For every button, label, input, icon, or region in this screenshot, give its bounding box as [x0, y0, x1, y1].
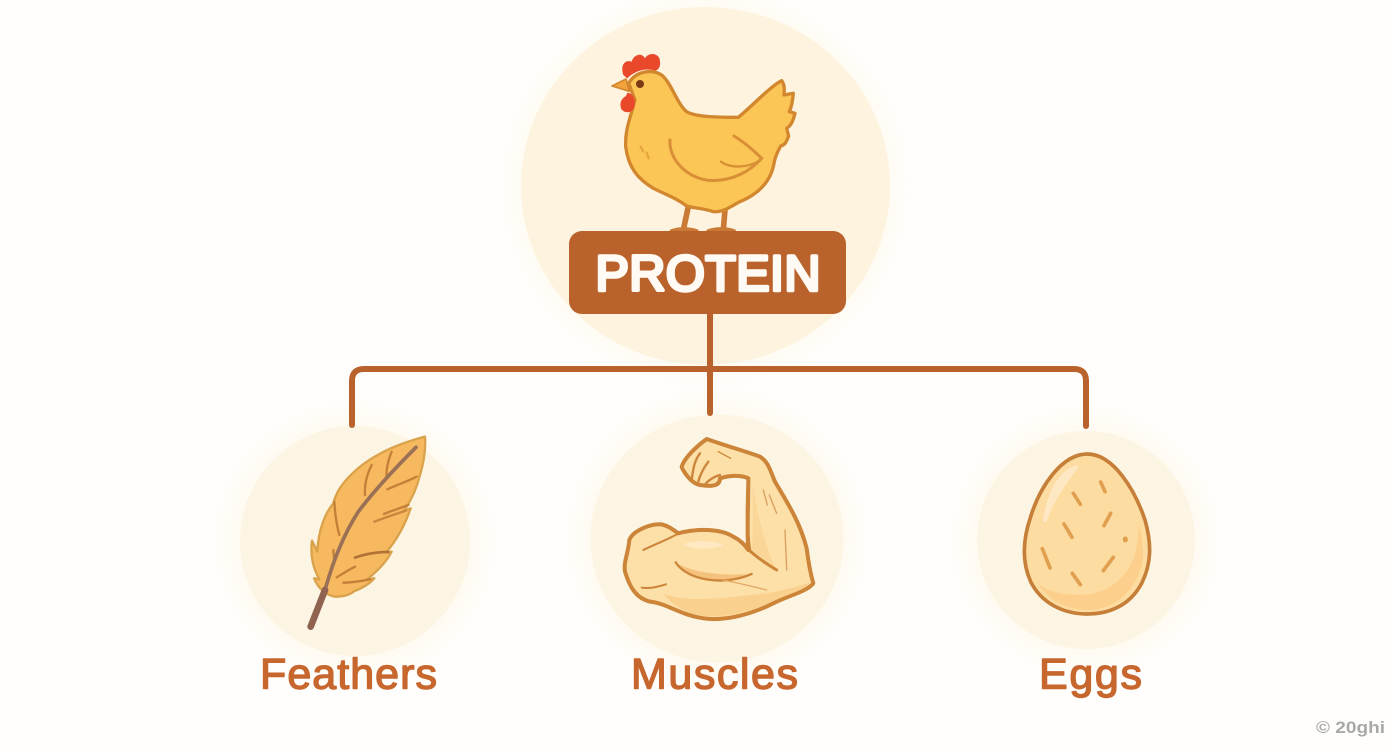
protein label	[569, 231, 846, 314]
eye	[636, 80, 644, 88]
label: muscles: Muscles	[631, 650, 798, 698]
label: eggs: Eggs	[1039, 650, 1142, 698]
connector lines	[352, 312, 1086, 426]
icon: chicken	[612, 54, 795, 231]
panel: protein circle	[521, 7, 890, 365]
protein label: PROTEIN	[596, 246, 820, 302]
comb	[622, 54, 660, 78]
panel: muscles circle	[590, 414, 844, 662]
panel: eggs circle	[977, 431, 1195, 649]
icon: feather	[311, 437, 425, 627]
beak	[612, 79, 629, 91]
icon: flexed arm	[625, 439, 813, 619]
label: feathers: Feathers	[260, 650, 437, 698]
panel: feathers circle	[240, 426, 470, 656]
wattle	[620, 93, 635, 112]
icon: egg	[1024, 454, 1150, 614]
watermark: © 20ghi	[1316, 718, 1385, 737]
